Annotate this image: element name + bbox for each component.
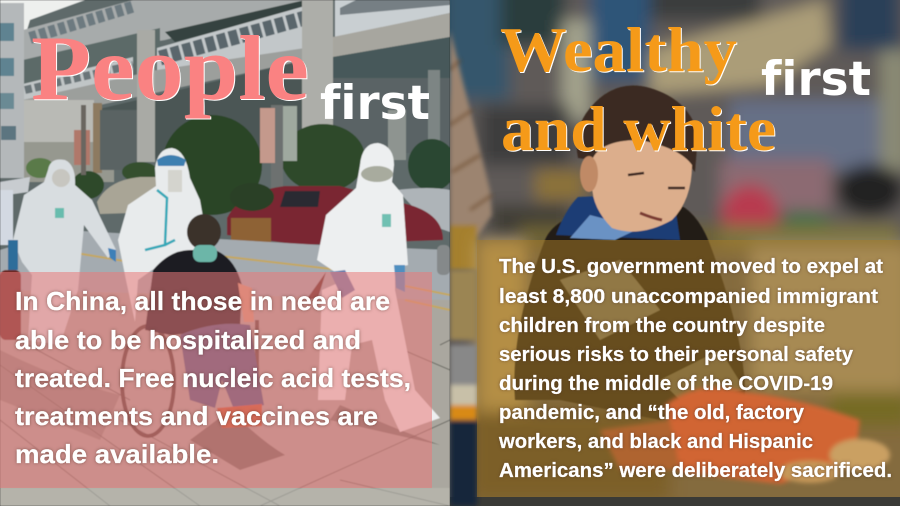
text block: China: treated. Free nucleic acid tests,	[15, 363, 411, 393]
trees	[26, 115, 456, 215]
panel: tan translucent text box	[477, 240, 900, 497]
photo: child at border, blurred background	[440, 0, 900, 506]
title: first (right): first	[761, 52, 871, 107]
text block: China: treatments and vaccines are	[15, 401, 378, 431]
text block: United States	[498, 256, 892, 482]
child	[514, 86, 745, 420]
photo: hospital street scene	[0, 0, 456, 506]
panel: left China photo	[0, 0, 456, 506]
panel: right U.S. photo	[440, 0, 900, 506]
text block: United States: workers, and black and Hispanic	[498, 431, 813, 453]
low building	[24, 100, 137, 182]
panel: pink translucent text box	[0, 272, 432, 488]
ground behind panel	[470, 240, 900, 500]
text block: China: made available.	[15, 439, 219, 469]
text block: China: In China, all those in need are	[15, 286, 390, 316]
cars	[0, 177, 450, 250]
striped fabric at left edge	[450, 30, 492, 270]
text block: United States: Americans” were deliberately sacrificed.	[499, 460, 892, 482]
text block: China	[15, 286, 411, 469]
text block: United States: least 8,800 unaccompanied immigrant	[499, 286, 878, 308]
title: Wealthy: Wealthy	[500, 14, 737, 85]
medic left	[0, 159, 116, 345]
title: first (left): first	[320, 76, 430, 131]
viaduct decks	[23, 0, 450, 165]
dark ground strip	[450, 497, 900, 506]
banner pole	[74, 104, 298, 188]
pink trousers and foot	[600, 387, 890, 484]
text block: United States: during the middle of the COVID-19	[499, 373, 833, 395]
patient in wheelchair	[122, 214, 264, 436]
text block: United States: pandemic, and “the old, factory	[499, 402, 805, 424]
left dark edge	[450, 270, 477, 506]
text block: United States: The U.S. government moved to expel at	[499, 256, 883, 278]
medic right	[306, 143, 440, 432]
text block: United States: children from the country despite	[499, 315, 825, 337]
text block: United States: serious risks to their personal safety	[499, 344, 854, 366]
left building	[0, 3, 24, 178]
pavement	[0, 230, 450, 506]
title: and white: and white	[501, 93, 776, 164]
text block: China: able to be hospitalized and	[15, 325, 361, 355]
medic centre	[118, 148, 207, 322]
blurred background	[440, 0, 900, 506]
title: People: People	[31, 17, 309, 119]
